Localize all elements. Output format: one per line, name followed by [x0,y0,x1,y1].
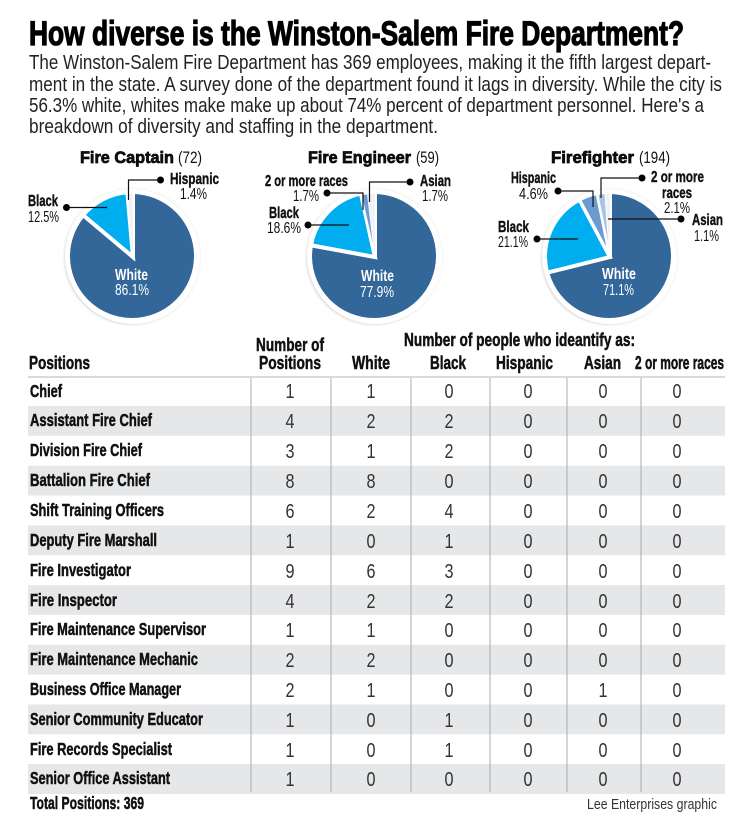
label: white 71.1%: White [602,266,636,283]
table header: Asian [584,353,621,373]
row: fire maintenance mechanic: 0 [672,650,682,672]
row: chief: 0 [598,381,608,403]
row: fire maintenance mechanic: 0 [524,650,532,672]
row: battalion fire chief: 8 [366,471,376,493]
callout: asian 1.7%: Asian [420,173,451,190]
row: fire investigator: 0 [672,561,682,583]
row: division fire chief: Division Fire Chief [30,440,142,460]
row: chief [30,381,682,403]
row: assistant fire chief: 2 [366,411,376,433]
panel: firefighter pie chart [498,148,723,324]
row: fire inspector: 0 [598,591,608,613]
row: fire maintenance supervisor: 1 [286,620,294,642]
row: senior community educator: 0 [524,710,532,732]
row: fire investigator: 0 [524,561,532,583]
row: division fire chief: 2 [444,441,454,463]
row: assistant fire chief: 0 [524,411,532,433]
total positions: Total Positions: 369 [30,793,144,813]
callout: 2 or more races 1.7%: 2 or more races [265,173,348,190]
row: deputy fire marshall: 0 [598,531,608,553]
row: fire records specialist: 0 [672,740,682,762]
label: white 77.9% [360,268,394,301]
row: assistant fire chief: 0 [672,411,682,433]
row: shift training officers: 0 [524,501,532,523]
row: senior office assistant [30,768,682,791]
row: business office manager: Business Office Manager [30,679,181,699]
row: senior office assistant: 0 [598,769,608,791]
row: fire inspector: 2 [444,591,454,613]
row: senior community educator: 1 [286,710,294,732]
panel: fire engineer pie chart [265,148,451,324]
row: fire inspector [30,590,682,613]
table header: Positions [29,353,90,373]
row: fire maintenance supervisor: 0 [672,620,682,642]
row: fire records specialist: 0 [598,740,608,762]
intro text block [29,52,722,138]
row: fire investigator: 9 [286,561,294,583]
row: senior office assistant: Senior Office Assistant [30,768,170,788]
row: fire inspector: Fire Inspector [30,590,117,610]
row: business office manager: 0 [524,680,532,702]
row: deputy fire marshall [30,530,682,553]
row: assistant fire chief: Assistant Fire Chief [30,410,152,430]
row: business office manager: 0 [444,680,454,702]
label: white 77.9%: 77.9% [360,284,394,301]
row: fire inspector: 2 [366,591,376,613]
row: chief: 1 [366,381,376,403]
row: assistant fire chief: 4 [286,411,294,433]
label: white 77.9%: White [361,268,394,285]
table header: White [352,353,390,373]
table header: Hispanic [496,353,553,373]
row: fire maintenance mechanic: Fire Maintenance Mechanic [30,649,198,669]
heading: fire engineer: Fire Engineer [308,148,411,167]
row: division fire chief: 0 [672,441,682,463]
row: deputy fire marshall: 1 [286,531,294,553]
callout: black 12.5% [28,193,107,226]
row: fire maintenance mechanic: 0 [598,650,608,672]
row: battalion fire chief [30,470,682,493]
row: assistant fire chief: 0 [598,411,608,433]
callout: 2 or more races 1.7% [265,173,363,210]
label: white 71.1% [602,266,636,299]
callout: black 18.6%: Black [269,205,299,222]
row: senior community educator [30,709,682,732]
row: senior office assistant: 0 [444,769,454,791]
callout: hispanic 4.6% [511,170,593,207]
row: chief: 1 [286,381,294,403]
row: fire records specialist: 1 [444,740,454,762]
row: shift training officers: 6 [286,501,294,523]
row: assistant fire chief: 2 [444,411,454,433]
callout: black 21.1% [498,219,578,251]
row: fire investigator: 6 [366,561,376,583]
row: division fire chief: 1 [366,441,376,463]
row: senior community educator: Senior Community Educator [30,709,203,729]
callout: black 18.6% [267,205,349,237]
row: deputy fire marshall: 0 [366,531,376,553]
heading: fire captain: Fire Captain [80,148,174,167]
callout: asian 1.7%: 1.7% [422,188,448,205]
row: battalion fire chief: 0 [524,471,532,493]
row: battalion fire chief: 0 [598,471,608,493]
callout: 2 or more races 2.1% [601,169,704,217]
row: fire maintenance supervisor: 1 [366,620,376,642]
row: battalion fire chief: Battalion Fire Chief [30,470,150,490]
callout: asian 1.1% [608,212,723,245]
table header [29,330,724,373]
row: chief: 0 [672,381,682,403]
row: fire records specialist: 1 [286,740,294,762]
heading: firefighter: (194) [639,148,670,167]
row: division fire chief: 0 [598,441,608,463]
table header: Black [430,353,467,373]
intro text block: breakdown of diversity and staffing in the department. [29,116,438,138]
row: business office manager: 0 [672,680,682,702]
pie: fire engineer [308,190,440,324]
row: senior office assistant: 0 [672,769,682,791]
row: business office manager: 1 [366,680,376,702]
row: fire maintenance supervisor: 0 [444,620,454,642]
heading: fire captain: (72) [178,148,202,167]
table header: Positions [259,353,321,373]
row: battalion fire chief: 0 [444,471,454,493]
row: shift training officers: 0 [598,501,608,523]
row: fire maintenance supervisor [30,619,682,642]
row: fire inspector: 0 [524,591,532,613]
row: chief: 0 [524,381,532,403]
callout: asian 1.1%: Asian [692,212,723,229]
row: senior office assistant: 0 [366,769,376,791]
callout: 2 or more races 2.1%: 2 or more [651,169,704,186]
row: shift training officers: 4 [444,501,454,523]
row: deputy fire marshall: 0 [672,531,682,553]
row: fire maintenance supervisor: 0 [524,620,532,642]
row: division fire chief [30,440,682,463]
row: fire records specialist: 0 [524,740,532,762]
callout: 2 or more races 2.1%: races [662,185,692,202]
row: fire maintenance mechanic: 0 [444,650,454,672]
row: shift training officers: Shift Training Officers [30,500,164,520]
heading: fire engineer: (59) [416,148,439,167]
label: white 86.1%: 86.1% [115,282,149,299]
row: senior community educator: 1 [444,710,454,732]
row: senior community educator: 0 [598,710,608,732]
row: senior office assistant: 1 [286,769,294,791]
row: shift training officers: 2 [366,501,376,523]
row: fire maintenance supervisor: 0 [598,620,608,642]
row: shift training officers [30,500,682,523]
row: division fire chief: 0 [524,441,532,463]
callout: hispanic 4.6%: 4.6% [519,186,548,203]
row: fire records specialist [30,739,682,762]
row: fire maintenance mechanic [30,649,682,672]
callout: black 21.1%: 21.1% [498,234,528,251]
row: fire maintenance supervisor: Fire Maintenance Supervisor [30,619,206,639]
row: fire investigator [30,560,682,583]
row: senior office assistant: 0 [524,769,532,791]
row: deputy fire marshall: 0 [524,531,532,553]
label: white 86.1% [115,267,149,299]
callout: hispanic 1.4%: Hispanic [170,171,219,188]
credit: Lee Enterprises graphic [587,796,717,813]
pie: firefighter [542,190,676,324]
label: white 71.1%: 71.1% [603,282,634,299]
row: fire inspector: 0 [672,591,682,613]
row: fire maintenance mechanic: 2 [366,650,376,672]
callout: hispanic 1.4% [128,171,219,203]
callout: black 21.1%: Black [498,219,529,236]
row: business office manager: 2 [286,680,294,702]
heading: firefighter: Firefighter [551,148,634,167]
row: deputy fire marshall: 1 [444,531,454,553]
callout: black 12.5%: 12.5% [28,209,59,226]
row: assistant fire chief [30,410,682,433]
row: senior community educator: 0 [366,710,376,732]
label: white 86.1%: White [115,267,148,284]
callout: hispanic 4.6%: Hispanic [511,170,556,187]
panel: fire captain pie chart [28,148,219,324]
callout: black 18.6%: 18.6% [267,220,301,237]
table: positions and diversity [28,330,725,794]
row: fire investigator: 0 [598,561,608,583]
row: business office manager: 1 [598,680,608,702]
row: chief: Chief [30,381,62,401]
callout: asian 1.1%: 1.1% [694,228,719,245]
callout: hispanic 1.4%: 1.4% [180,186,207,203]
row: fire records specialist: Fire Records Specialist [30,739,172,759]
table header: Number of [256,335,325,355]
callout: 2 or more races 1.7%: 1.7% [293,188,319,205]
callout: asian 1.7% [370,173,451,205]
row: battalion fire chief: 8 [286,471,294,493]
row: shift training officers: 0 [672,501,682,523]
callout: 2 or more races 2.1%: 2.1% [664,200,690,217]
row: business office manager [30,679,682,702]
row: senior community educator: 0 [672,710,682,732]
table header: Number of people who ideantify as: [404,330,635,350]
row: deputy fire marshall: Deputy Fire Marshall [30,530,157,550]
row: chief: 0 [444,381,454,403]
callout: black 12.5%: Black [28,193,58,210]
row: fire investigator: 3 [444,561,454,583]
row: division fire chief: 3 [286,441,294,463]
row: battalion fire chief: 0 [672,471,682,493]
row: fire investigator: Fire Investigator [30,560,131,580]
row: fire records specialist: 0 [366,740,376,762]
row: fire inspector: 4 [286,591,294,613]
row: fire maintenance mechanic: 2 [286,650,294,672]
pie: fire captain [66,190,198,324]
